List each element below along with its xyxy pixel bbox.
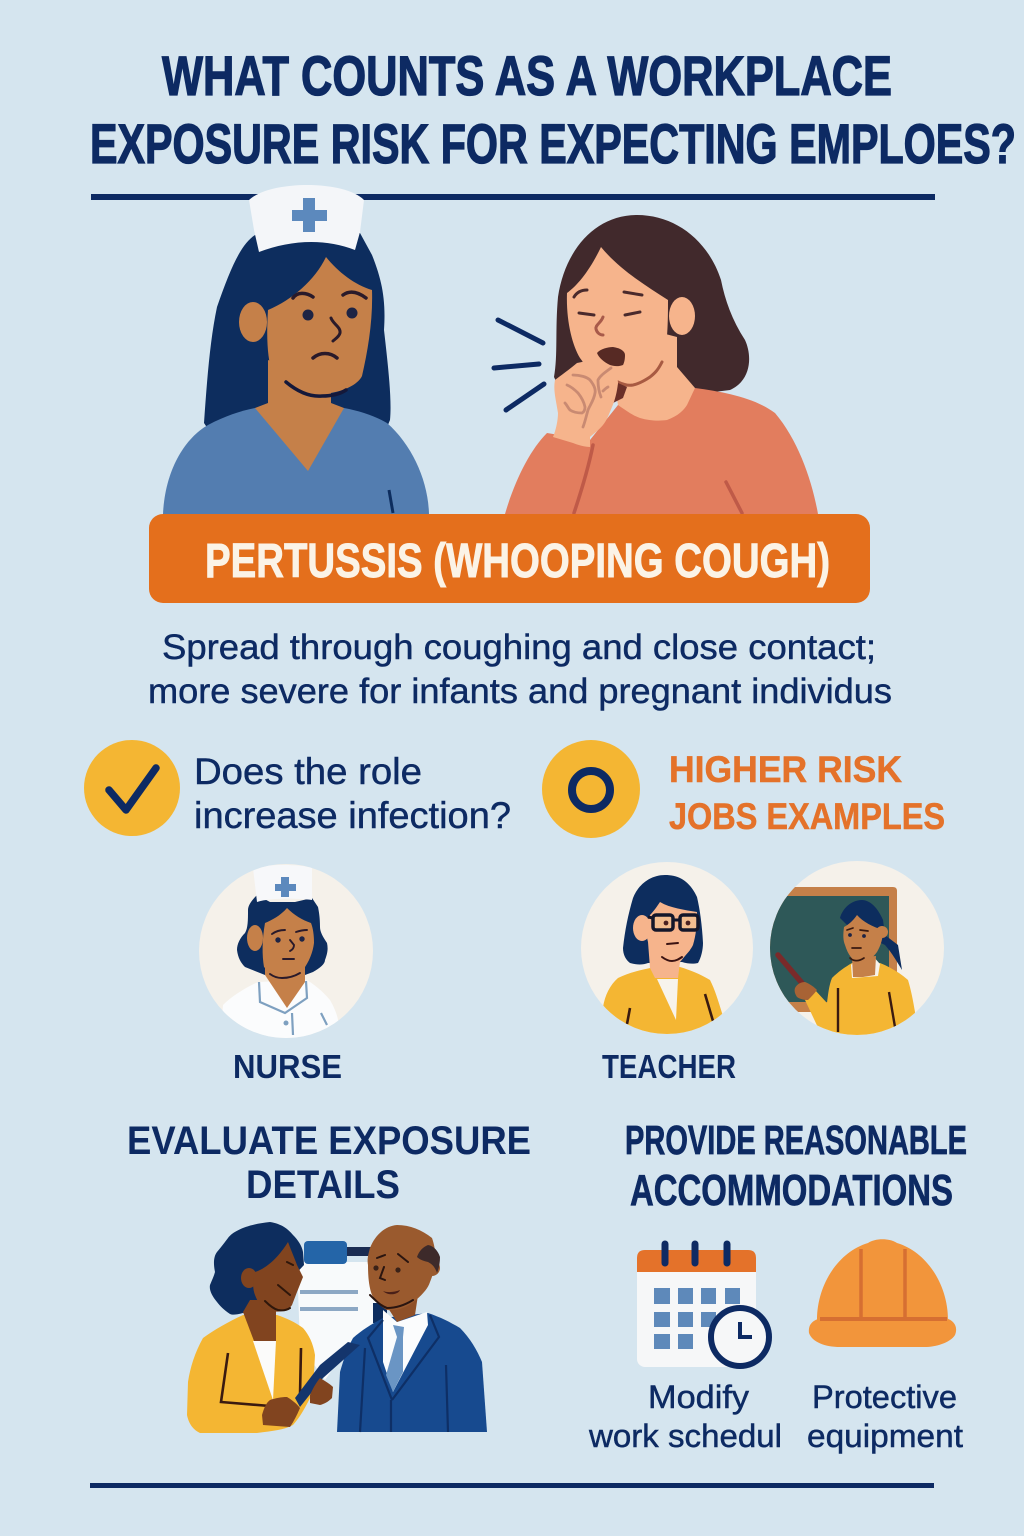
icon: cough lines — [494, 320, 544, 410]
folder and hands — [262, 1342, 360, 1427]
portrait: teacher at blackboard — [765, 861, 944, 1040]
heading: evaluate exposure details: DETAILS — [246, 1163, 400, 1207]
woman — [187, 1222, 315, 1433]
question text: increase infection? — [194, 795, 511, 836]
illustration: coughing patient — [505, 215, 818, 514]
caption: modify work schedule: work schedul — [588, 1418, 782, 1454]
illustration: nurse — [163, 185, 429, 514]
caption: modify work schedule: Modify — [648, 1379, 749, 1415]
description text — [148, 628, 892, 711]
heading: higher risk jobs: HIGHER RISK — [669, 749, 902, 790]
portrait: teacher — [581, 862, 753, 1040]
clipboard — [297, 1241, 387, 1380]
caption: modify work schedule — [588, 1379, 782, 1454]
caption: protective equipment: Protective — [812, 1379, 957, 1415]
description text: more severe for infants and pregnant individus — [148, 672, 892, 711]
banner: pertussis — [149, 514, 870, 603]
icon: checkmark — [84, 740, 180, 836]
heading: evaluate exposure details: EVALUATE EXPOSURE — [127, 1119, 531, 1163]
icon: fist — [553, 358, 618, 447]
man — [337, 1225, 487, 1432]
description text: Spread through coughing and close contact; — [162, 628, 876, 667]
heading: provide reasonable accommodations — [625, 1117, 967, 1215]
heading: higher risk jobs: JOBS EXAMPLES — [669, 796, 945, 837]
question text: Does the role — [194, 751, 422, 792]
label: nurse: NURSE — [233, 1048, 342, 1085]
caption: protective equipment: equipment — [807, 1418, 963, 1454]
caption: protective equipment — [807, 1379, 963, 1454]
icon: calendar with clock — [637, 1244, 769, 1367]
question text — [194, 751, 511, 836]
icon: ring — [542, 740, 640, 838]
icon: nurse cap — [249, 185, 364, 252]
portrait: nurse — [199, 864, 373, 1045]
heading: evaluate exposure details — [127, 1119, 531, 1207]
banner: pertussis: PERTUSSIS (WHOOPING COUGH) — [205, 535, 830, 588]
label: teacher: TEACHER — [602, 1048, 736, 1085]
heading: higher risk jobs — [669, 749, 945, 837]
icon: hard hat — [809, 1239, 956, 1347]
illustration: two colleagues reviewing clipboard — [187, 1222, 487, 1433]
title — [90, 44, 1016, 175]
